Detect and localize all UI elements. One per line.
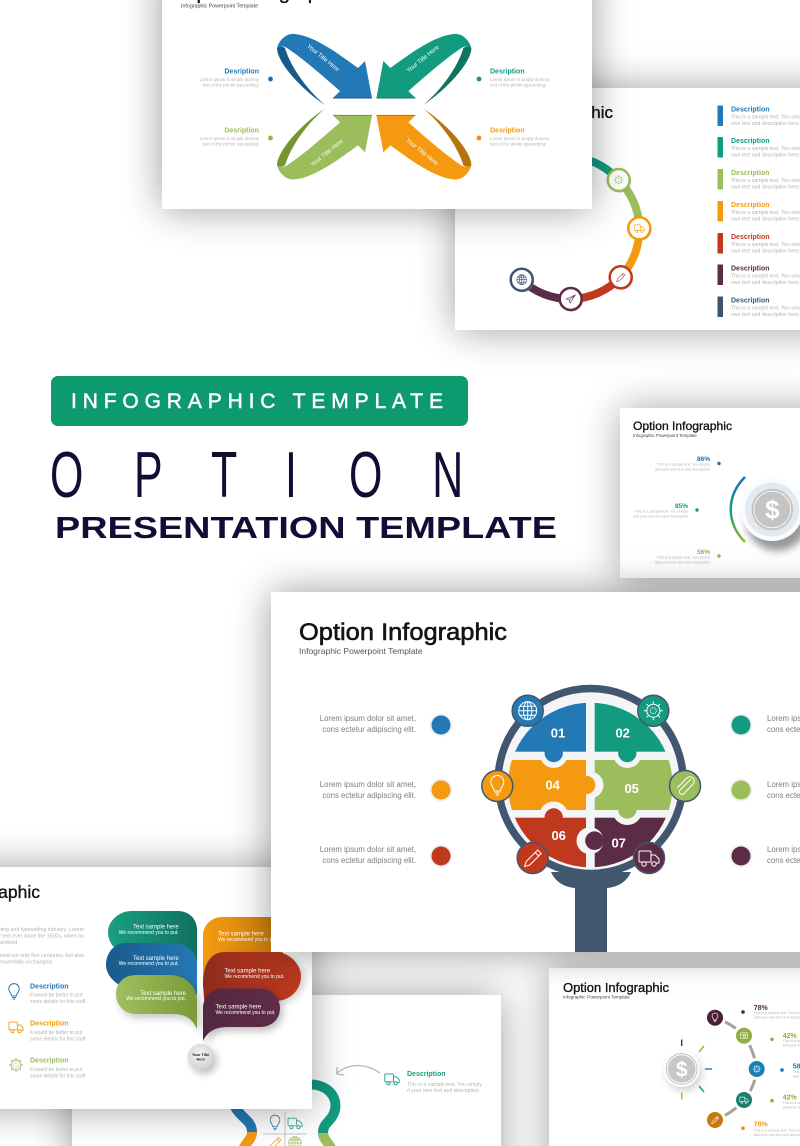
- icon: pen: [517, 842, 548, 874]
- bubble: blue: We recommend you to put.: [119, 961, 179, 967]
- left item 2: cons ectetur adipiscing elit.: [322, 791, 416, 800]
- node: blue: [746, 1058, 768, 1080]
- bubble: teal: [108, 911, 197, 964]
- description: This is a sample text. You simply: [407, 1082, 482, 1088]
- arc segments: [522, 161, 639, 299]
- subtitle: Infographic Powerpoint Template: [181, 4, 258, 10]
- list item: bulb: some details for this stuff.: [30, 999, 87, 1005]
- badge: your title here: [188, 1044, 217, 1074]
- body text: aved not only five centuries, but also: [0, 953, 84, 959]
- panel: circular path slide: [455, 88, 800, 330]
- icon: paperclip: [670, 770, 700, 802]
- description: teal: Desription: [490, 68, 525, 76]
- node: orange: [704, 1109, 726, 1131]
- banner: infographic template: INFOGRAPHIC TEMPLATE: [71, 390, 443, 413]
- stat: 42 green: [770, 1033, 800, 1048]
- arrow: green: Your Title Here: [310, 138, 345, 168]
- subtitle: Infographic Powerpoint Template: [299, 646, 423, 656]
- bubble: green: Text sample here: [140, 991, 187, 997]
- legend: Description: [731, 298, 770, 304]
- node: globe: [511, 269, 534, 292]
- piece numbers: [545, 726, 639, 850]
- node: pen: [610, 266, 633, 290]
- description: teal: text of the printin typesetting!: [490, 82, 546, 88]
- right item 2: [730, 778, 800, 802]
- title: Option Infographic: [633, 419, 732, 433]
- left item 3: cons ectetur adipiscing elit.: [322, 856, 416, 865]
- legend: Description: [731, 234, 770, 241]
- arrow: blue: Your Title Here: [305, 44, 340, 74]
- connector ring: [715, 1018, 757, 1120]
- legend: own text and description here.: [731, 184, 800, 190]
- bubble: maroon: [203, 988, 283, 1045]
- list item: bulb: Description: [30, 984, 69, 990]
- description: [407, 1071, 482, 1094]
- dollar coin: [664, 1051, 702, 1091]
- right item 1: [730, 714, 800, 736]
- node: green: [733, 1025, 755, 1047]
- piece numbers: 06: [551, 828, 566, 843]
- dollar coin: $: [676, 1058, 688, 1082]
- panel: arrows slide: [162, 0, 592, 209]
- list item: gear: It would be better to put: [30, 1067, 83, 1073]
- legend: Description: [731, 202, 770, 209]
- description: Description: [407, 1071, 446, 1078]
- stat: 78 maroon: 78%: [754, 1005, 768, 1012]
- bubble: orange: Text sample here: [218, 932, 264, 938]
- title: Option Infographic: [474, 103, 614, 122]
- piece numbers: 02: [615, 726, 630, 740]
- dollar coin: $: [765, 494, 780, 524]
- arrow: teal: [376, 34, 471, 105]
- description: orange: [477, 128, 550, 146]
- icon: gear: [638, 695, 669, 726]
- list item: truck: [9, 1020, 87, 1042]
- bubble: green: We recommend you to put.: [126, 996, 186, 1002]
- description: teal: [477, 68, 550, 88]
- magnifier handle: [551, 872, 631, 952]
- body text: [0, 927, 85, 966]
- stat: 85: This is a sample text. You simply: [635, 510, 688, 514]
- icon: bulb: [482, 770, 513, 802]
- node: gear: [608, 169, 631, 192]
- arrow: orange: Your Title Here: [404, 138, 439, 168]
- description: blue: Desription: [224, 68, 259, 76]
- legend: Description: [731, 266, 770, 272]
- legend: own text and description here.: [731, 121, 800, 127]
- bubble: blue: [106, 943, 197, 995]
- gradient arc: [731, 477, 745, 542]
- stat: 86: This is a sample text. You simply: [657, 462, 710, 466]
- stat: 58 blue: [780, 1064, 800, 1078]
- legend: own text and description here.: [731, 152, 800, 158]
- radial marks: [682, 1040, 712, 1100]
- bubble: orange: [203, 917, 285, 985]
- legend: Description: [731, 106, 770, 114]
- left item 1: cons ectetur adipiscing elit.: [322, 725, 416, 734]
- subtitle: Infographic Powerpoint Template: [633, 433, 697, 438]
- panel: bottom right slide: [549, 968, 800, 1146]
- arrow: blue: [277, 34, 372, 105]
- left item 3: [320, 844, 452, 868]
- legend: [718, 106, 800, 318]
- stat: 78 orange: [741, 1122, 800, 1137]
- stat: 86: add your own text and description: [655, 468, 710, 472]
- icon: truck: [385, 1074, 399, 1085]
- piece numbers: 01: [551, 726, 565, 740]
- list item: gear: Description: [30, 1058, 69, 1064]
- legend: own text and description here.: [731, 280, 800, 286]
- list item: bulb: It would be better to put: [30, 992, 83, 998]
- stat: 42 green lower: [770, 1094, 800, 1110]
- right item 3: [730, 844, 800, 868]
- title: Option Infographic: [299, 619, 507, 646]
- badge: your title here: Here: [196, 1058, 205, 1062]
- list item: gear: [9, 1058, 87, 1080]
- badge: your title here: Your Title: [192, 1053, 209, 1057]
- legend: own text and description here.: [731, 248, 800, 254]
- piece numbers: 04: [545, 778, 561, 792]
- left item 2: [320, 778, 452, 802]
- stat: 78 maroon: [741, 1005, 800, 1020]
- legend: own text and description here.: [731, 216, 800, 222]
- left item 1: [320, 714, 452, 736]
- description: d your own text and description: [407, 1088, 479, 1094]
- node: truck: [628, 217, 652, 241]
- bubble: teal: We recommend you to put.: [119, 930, 179, 936]
- node: plane: [560, 288, 583, 312]
- stat: 56: [655, 549, 721, 564]
- list item: bulb: [9, 984, 87, 1005]
- bubble: red: We recommend you to put.: [224, 974, 284, 980]
- bubble: teal: Text sample here: [133, 925, 179, 931]
- dollar coin: [740, 478, 800, 551]
- description: orange: text of the printin typesetting!: [490, 142, 546, 146]
- description: green: [200, 128, 273, 146]
- list item: truck: some details for this stuff.: [30, 1036, 87, 1042]
- centre icon grid: [263, 1112, 307, 1146]
- bubble: maroon: Text sample here: [216, 1004, 262, 1010]
- icon: globe: [512, 695, 543, 726]
- bubble: red: Text sample here: [224, 968, 271, 974]
- banner: infographic template: [51, 376, 468, 426]
- stat: 86: 86%: [697, 456, 710, 463]
- node: maroon: [704, 1007, 726, 1029]
- title: Option Infographic: [563, 980, 669, 995]
- list item: truck: Description: [30, 1020, 69, 1028]
- list item: truck: It would be better to put: [30, 1030, 83, 1036]
- description: green: Desription: [224, 128, 259, 134]
- stat: 56: 56%: [697, 549, 710, 556]
- legend: own text and description here.: [731, 312, 800, 318]
- bubble: green: [116, 975, 200, 1033]
- legend: Description: [731, 170, 770, 177]
- body text: ambled: [0, 940, 17, 946]
- description: teal: Lorem Ipsum is simply dummy: [490, 77, 550, 82]
- list item: gear: some details for this stuff.: [30, 1074, 87, 1080]
- stat: 85: 85%: [675, 503, 688, 510]
- description: blue: [200, 68, 273, 88]
- puzzle: [508, 702, 672, 868]
- stat: 56: This is a sample text. You simply: [657, 556, 710, 560]
- stat: 56: add your own text and description: [655, 560, 710, 564]
- bubble: blue: Text sample here: [133, 956, 179, 962]
- description: orange: Lorem Ipsum is simply dummy: [490, 136, 550, 141]
- node: teal: [733, 1089, 755, 1111]
- bubble: maroon: We recommend you to put.: [216, 1010, 275, 1016]
- stat: 42 green lower: 42%: [783, 1094, 797, 1102]
- left item 1: Lorem ipsum dolor sit amet,: [320, 714, 416, 723]
- arrow: teal: Your Title Here: [406, 44, 441, 74]
- arrow: orange: [376, 108, 471, 180]
- legend: Description: [731, 138, 770, 145]
- bubble: red: [203, 952, 304, 1013]
- piece numbers: 05: [624, 781, 639, 796]
- panel: bottom centre slide: [72, 995, 501, 1146]
- panel: gauge slide: [620, 408, 800, 583]
- description: blue: Lorem Ipsum is simply dummy: [200, 77, 260, 82]
- heading: presentation template: PRESENTATION TEMPLATE: [55, 510, 557, 545]
- stat: 85: add your own text and description: [633, 514, 688, 518]
- bubble: orange: We recommend you to put.: [218, 937, 278, 943]
- stat: 78 orange: 78%: [754, 1122, 768, 1128]
- magnifier ring: [498, 688, 683, 874]
- snake path: [234, 1085, 335, 1146]
- stat: 85: [633, 503, 699, 518]
- stat: 42 green: 42%: [783, 1033, 797, 1040]
- panel: main puzzle slide: [271, 592, 800, 952]
- panel: speech bubbles slide: [0, 867, 312, 1109]
- piece numbers: 07: [611, 836, 626, 850]
- description: green: Lorem Ipsum is simply dummy: [200, 136, 260, 141]
- description: orange: Desription: [490, 128, 525, 134]
- heading: option: OPTION: [50, 438, 463, 511]
- arrow: green: [277, 108, 372, 180]
- left item 2: Lorem ipsum dolor sit amet,: [320, 780, 416, 789]
- description: blue: text of the printin typesetting!: [203, 82, 259, 88]
- curved arrow: [337, 1066, 380, 1075]
- subtitle: Infographic Powerpoint Template: [563, 994, 630, 1000]
- icon: truck: [634, 842, 664, 874]
- description: green: text of the printin typesetting!: [203, 142, 259, 146]
- stat: 86: [655, 456, 721, 472]
- left item 3: Lorem ipsum dolor sit amet,: [320, 845, 416, 854]
